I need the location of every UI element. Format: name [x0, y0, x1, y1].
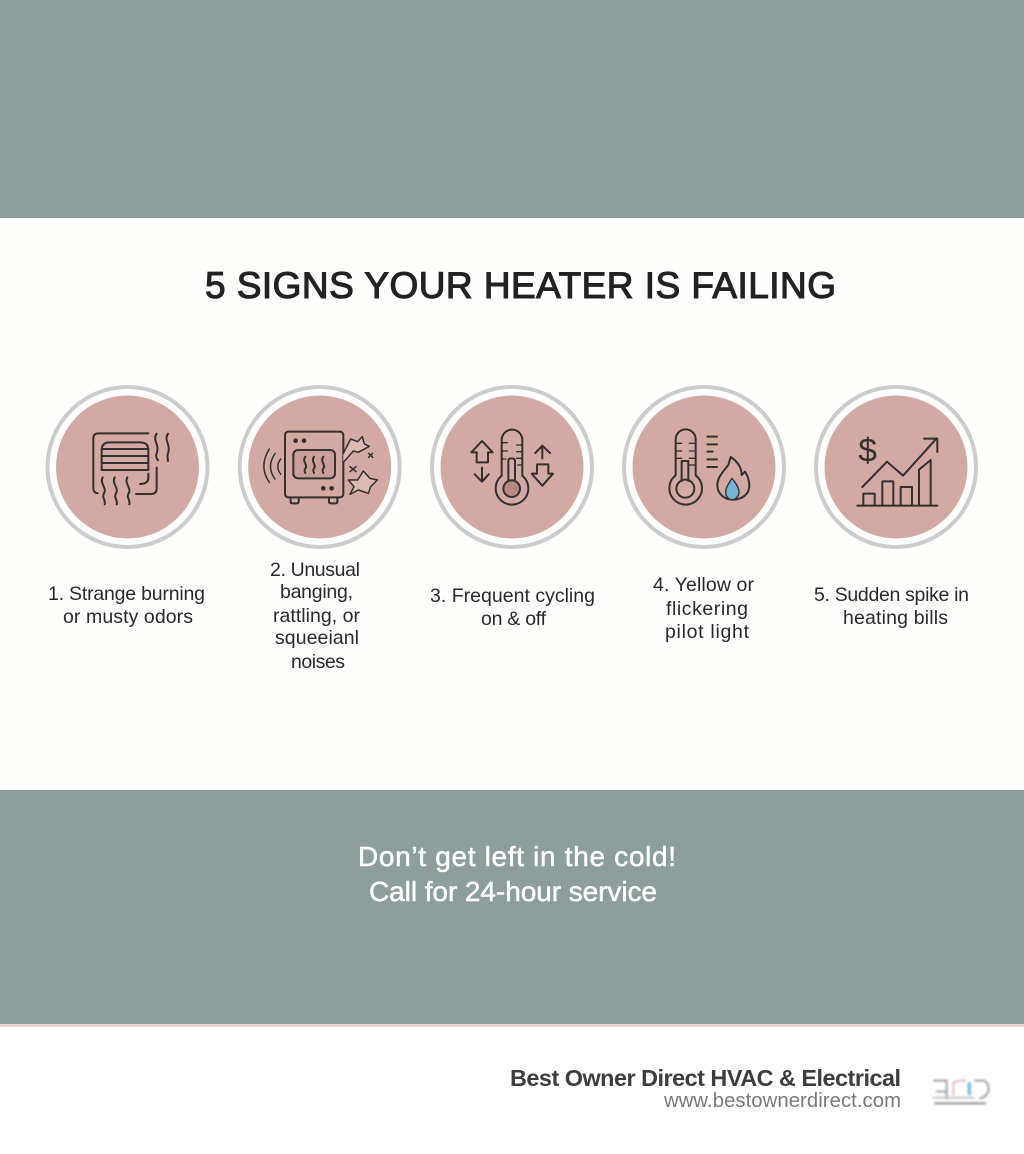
website: www.bestownerdirect.com — [663, 1090, 901, 1112]
label: heating bills — [843, 607, 948, 629]
label: 3. Frequent cycling — [430, 585, 595, 607]
pink divider — [0, 1024, 1024, 1027]
label: noises — [291, 651, 345, 673]
label: on & off — [481, 608, 547, 630]
label: pilot light — [665, 621, 750, 643]
icon: thermometer and flame — [669, 429, 749, 505]
label: squeeianl — [275, 627, 359, 649]
label: banging, — [280, 581, 353, 603]
icon: heater with noise bursts — [264, 432, 377, 503]
logo — [933, 1081, 989, 1103]
label: rattling, or — [273, 605, 360, 627]
label — [270, 559, 360, 673]
sign 5: spike in bills — [814, 387, 976, 629]
icon: dollar sign and rising chart — [857, 433, 937, 506]
sign 3: frequent cycling — [430, 387, 595, 630]
label: 1. Strange burning — [48, 583, 205, 605]
label — [653, 574, 754, 643]
label: 5. Sudden spike in — [814, 584, 969, 606]
call to action band — [0, 790, 1024, 1024]
label: 4. Yellow or — [653, 574, 754, 596]
call to action band: Don’t get left in the cold! — [358, 841, 676, 872]
call to action band: Call for 24-hour service — [369, 876, 657, 907]
label — [814, 584, 969, 629]
icon: air vent with odor waves — [93, 433, 169, 504]
icon: dollar sign and rising chart: $ — [858, 433, 877, 470]
sign 2: unusual noises — [240, 387, 400, 673]
company name: Best Owner Direct HVAC & Electrical — [510, 1065, 901, 1091]
sign 4: yellow pilot light — [624, 387, 784, 643]
footer block — [0, 1027, 1024, 1154]
label: 2. Unusual — [270, 559, 360, 581]
label: or musty odors — [63, 606, 193, 628]
label — [430, 585, 595, 630]
top band — [0, 0, 1024, 218]
icon: thermometer with up and down arrows — [471, 430, 553, 505]
label: flickering — [666, 598, 748, 620]
sign 1: burning or musty odors — [48, 387, 208, 628]
label — [48, 583, 205, 628]
title: 5 SIGNS YOUR HEATER IS FAILING — [205, 265, 836, 306]
